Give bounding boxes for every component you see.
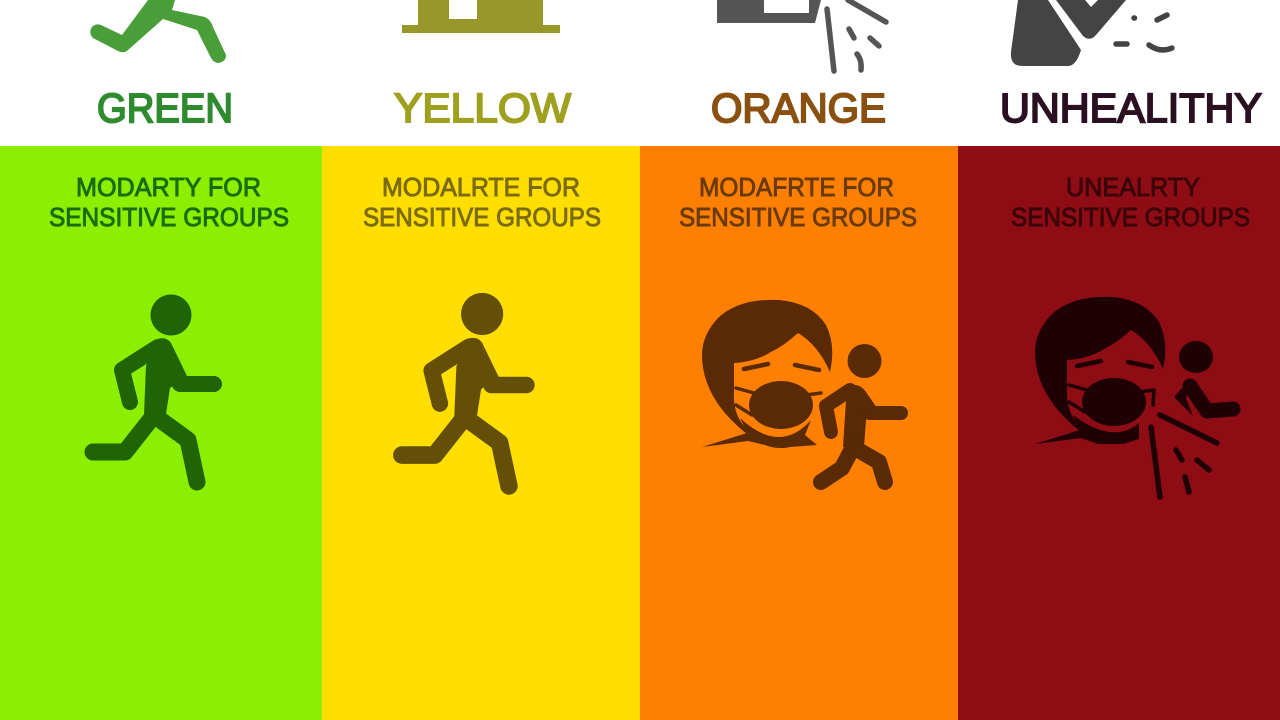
text: orange panel caption: [679, 172, 917, 232]
text: orange panel caption: SENSITIVE GROUPS: [679, 202, 917, 232]
text: green panel caption: MODARTY FOR: [76, 172, 261, 202]
icon: yellow building, cropped at top: [402, 0, 560, 33]
text: yellow panel caption: MODALRTE FOR: [382, 172, 580, 202]
icon: green panel runner: [93, 294, 214, 482]
text: yellow panel caption: SENSITIVE GROUPS: [363, 202, 601, 232]
panel: green: [0, 146, 322, 720]
text: red panel caption: [1011, 172, 1250, 232]
heading: unhealthy: UNHEALITHY: [1000, 85, 1262, 131]
icon: orange panel masked face: [702, 300, 832, 448]
icon: orange panel runner: [821, 344, 901, 482]
icon: green runner, cropped at top: [90, 0, 226, 63]
heading: orange: ORANGE: [711, 85, 886, 131]
text: red panel caption: UNEALRTY: [1066, 172, 1200, 202]
heading: yellow: YELLOW: [394, 85, 571, 131]
text: green panel caption: SENSITIVE GROUPS: [49, 202, 289, 232]
panel: yellow: [322, 146, 640, 720]
text: green panel caption: [49, 172, 289, 232]
icon: factory with spray lines, cropped at top: [717, 0, 886, 71]
icon: yellow panel runner: [402, 293, 526, 486]
heading: green: GREEN: [97, 85, 233, 131]
icon: coughing figure, cropped at top: [1011, 0, 1172, 66]
icon: red panel runner and spray: [1151, 341, 1233, 497]
text: orange panel caption: MODAFRTE FOR: [699, 172, 894, 202]
icon: red panel masked face: [1035, 297, 1165, 444]
text: yellow panel caption: [363, 172, 601, 232]
text: red panel caption: SENSITIVE GROUPS: [1011, 202, 1250, 232]
panel: unhealthy red: [958, 146, 1280, 720]
panel: orange: [640, 146, 958, 720]
